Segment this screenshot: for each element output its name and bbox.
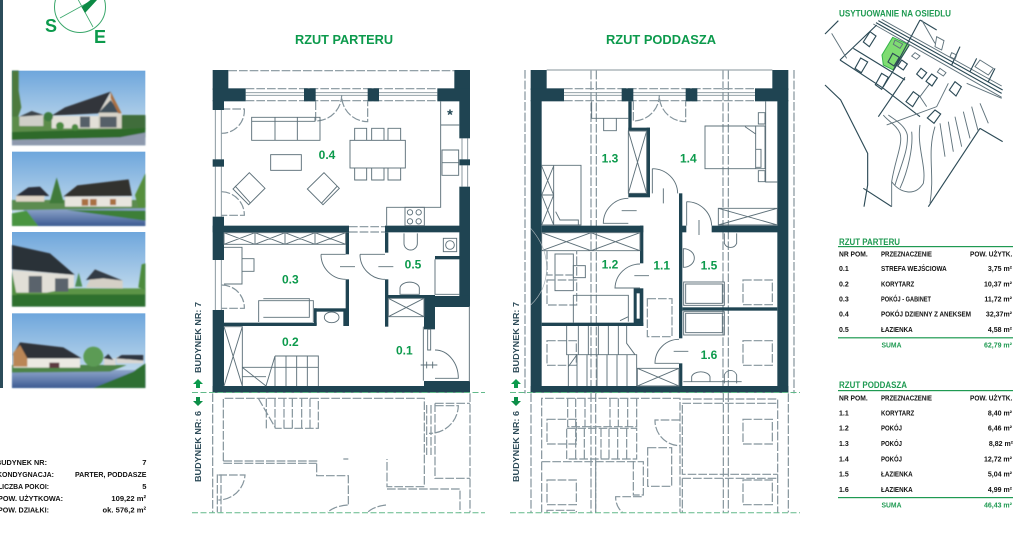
photo: visualisation 1 <box>12 71 145 145</box>
table: upper floor areas: 1.2 <box>839 426 849 433</box>
table: upper floor areas: 6,46 m² <box>988 426 1013 433</box>
building data list: 109,22 m² <box>111 494 146 503</box>
table: ground floor areas: STREFA WEJŚCIOWA <box>881 264 947 273</box>
building data list: ok. 576,2 m² <box>103 506 146 514</box>
terrace and windows <box>215 71 468 310</box>
table: ground floor areas: KORYTARZ <box>881 281 915 288</box>
table: upper floor areas: POW. UŻYTK. <box>970 394 1012 402</box>
building data list <box>0 458 147 514</box>
room numbers: 1.1 <box>653 258 670 272</box>
table: ground floor areas: 0.2 <box>839 281 849 288</box>
room numbers: 1.3 <box>602 152 619 166</box>
plan: upper floor <box>525 70 794 393</box>
label: building 6, ground floor: BUDYNEK NR: 6 <box>193 411 203 482</box>
table: upper floor areas: ŁAZIENKA <box>881 472 913 479</box>
plan: ground floor <box>213 70 470 393</box>
building data list: 5 <box>142 482 147 491</box>
table: ground floor areas: SUMA <box>882 343 902 350</box>
table: upper floor areas: 1.1 <box>839 410 849 417</box>
walls <box>531 70 788 393</box>
table: ground floor areas: 3,75 m² <box>988 266 1013 273</box>
table: ground floor areas: 0.1 <box>839 266 849 273</box>
room numbers <box>282 148 422 357</box>
walls <box>213 70 470 393</box>
map: site plan <box>825 19 1003 207</box>
table: ground floor areas: 0.5 <box>839 327 849 334</box>
room numbers: 1.4 <box>680 152 697 166</box>
building data list: PARTER, PODDASZE <box>75 470 146 479</box>
room numbers: 1.6 <box>701 348 718 362</box>
icon: compass: S <box>45 16 57 36</box>
table: ground floor areas <box>838 237 1013 350</box>
table: ground floor areas: 4,58 m² <box>988 327 1013 334</box>
table: upper floor areas: 8,40 m² <box>988 410 1013 417</box>
room numbers: 0.4 <box>319 148 336 162</box>
table: ground floor areas: ŁAZIENKA <box>881 327 913 334</box>
building divider lines <box>192 392 800 513</box>
table: upper floor areas: POKÓJ <box>881 454 902 463</box>
photo: visualisation 2 <box>12 152 145 226</box>
building data list: 7 <box>142 458 146 467</box>
table: ground floor areas: 10,37 m² <box>984 281 1013 288</box>
room numbers: 0.2 <box>282 335 299 349</box>
table: ground floor areas: POKÓJ - GABINET <box>881 294 932 303</box>
table: ground floor areas: POW. UŻYTK. <box>970 250 1012 258</box>
heading: upper floor: RZUT PODDASZA <box>606 32 717 47</box>
table: upper floor areas: 1.4 <box>839 456 849 463</box>
table: upper floor areas: KORYTARZ <box>881 410 915 417</box>
table: upper floor areas: POKÓJ <box>881 439 902 448</box>
label: building 7, ground floor: BUDYNEK NR: 7 <box>193 302 203 373</box>
highlighted plot <box>882 37 909 70</box>
icon: compass <box>45 0 106 47</box>
table: upper floor areas <box>838 380 1014 509</box>
heading: ground floor: RZUT PARTERU <box>295 32 393 47</box>
table: ground floor areas: 11,72 m² <box>984 296 1013 303</box>
furniture: living room and kitchen: * <box>447 107 453 123</box>
room numbers: 1.2 <box>602 257 619 271</box>
furniture and fittings <box>531 101 777 386</box>
table: ground floor areas: POKÓJ DZIENNY Z ANEKSEM <box>881 310 971 319</box>
table: ground floor areas: 0.3 <box>839 296 849 303</box>
roof lines and windows <box>525 70 794 393</box>
plan: neighbouring building, ground floor outline <box>213 393 470 512</box>
room numbers: 0.1 <box>396 343 413 357</box>
table: upper floor areas: ŁAZIENKA <box>881 487 913 494</box>
table: ground floor areas: NR POM. <box>839 251 868 258</box>
heading: site location: USYTUOWANIE NA OSIEDLU <box>839 8 951 18</box>
room numbers: 0.5 <box>405 257 422 271</box>
table: upper floor areas: SUMA <box>882 502 902 509</box>
table: upper floor areas: RZUT PODDASZA <box>839 380 907 390</box>
table: upper floor areas: 1.5 <box>839 472 849 479</box>
table: ground floor areas: 32,37m² <box>986 312 1013 319</box>
table: upper floor areas: 46,43 m² <box>984 502 1013 509</box>
photo: visualisation 4 <box>12 313 145 388</box>
plan: neighbouring building, upper floor outline <box>531 393 788 512</box>
road <box>873 19 1003 97</box>
photo: visualisation 3 <box>12 232 145 307</box>
table: upper floor areas: 12,72 m² <box>984 456 1013 463</box>
table: upper floor areas: 5,04 m² <box>988 472 1013 479</box>
plots and paths <box>825 20 1003 207</box>
label: building 7, upper floor: BUDYNEK NR: 7 <box>511 302 521 373</box>
building data list: POW. UŻYTKOWA: <box>0 494 63 503</box>
furniture: living room and kitchen <box>233 101 459 226</box>
table: upper floor areas: 1.6 <box>839 487 849 494</box>
table: upper floor areas: POKÓJ <box>881 424 902 433</box>
icon: compass: E <box>94 27 106 47</box>
table: upper floor areas: 4,99 m² <box>988 487 1013 494</box>
table: ground floor areas: 0.4 <box>839 312 849 319</box>
table: ground floor areas: RZUT PARTERU <box>839 237 900 247</box>
room numbers: 1.5 <box>701 258 718 272</box>
table: upper floor areas: PRZEZNACZENIE <box>881 395 932 402</box>
furniture: office, bathroom and stairs <box>224 233 469 386</box>
left edge bar <box>0 0 3 388</box>
label: building 6, upper floor: BUDYNEK NR: 6 <box>511 411 521 482</box>
table: ground floor areas: PRZEZNACZENIE <box>881 251 932 258</box>
room numbers: 0.3 <box>282 272 299 286</box>
table: upper floor areas: 8,82 m² <box>989 441 1014 448</box>
table: upper floor areas: NR POM. <box>839 395 868 402</box>
room numbers <box>602 152 718 362</box>
houses <box>855 32 993 123</box>
table: ground floor areas: 62,79 m² <box>984 343 1013 350</box>
table: upper floor areas: 1.3 <box>839 441 849 448</box>
